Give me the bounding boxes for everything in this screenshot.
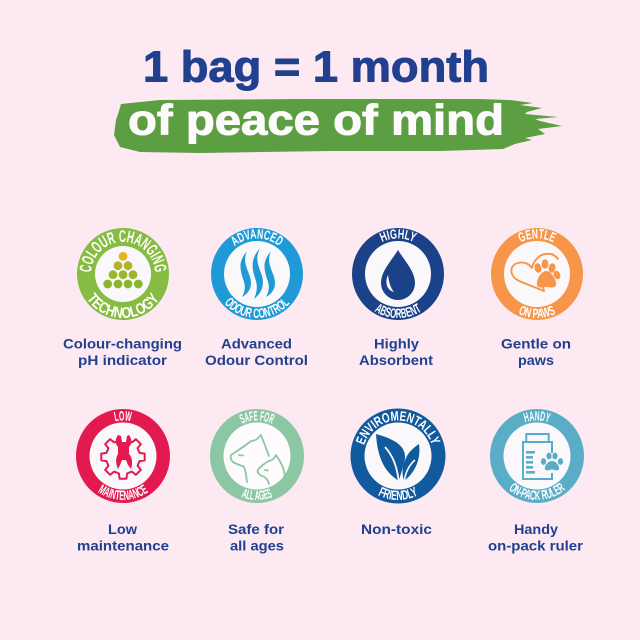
icon: heart with paw xyxy=(511,254,562,291)
label: gentle on paws: paws xyxy=(518,352,554,368)
label: low maintenance: maintenance xyxy=(77,538,169,554)
badge: low maintenance xyxy=(76,409,170,503)
badge: gentle on paws xyxy=(491,228,583,320)
label: highly absorbent: Highly xyxy=(374,336,419,352)
badge text: odour control: ODOUR CONTROL xyxy=(226,298,290,318)
badge text: gentle: GENTLE xyxy=(518,229,556,242)
badge text: friendly: FRIENDLY xyxy=(378,486,416,500)
label: highly absorbent: Absorbent xyxy=(359,352,433,368)
badge text: safe for: SAFE FOR xyxy=(239,411,275,424)
green brush banner with subtitle xyxy=(114,96,562,153)
label: advanced odour control: Advanced xyxy=(221,336,292,352)
icon: pyramid of dots xyxy=(103,252,143,288)
icon: two leaves xyxy=(376,434,419,483)
icon: gear and wrench xyxy=(101,433,145,479)
label: handy on-pack ruler xyxy=(488,521,584,554)
badge text: handy: HANDY xyxy=(523,411,552,422)
badge text: on paws: ON PAWS xyxy=(519,306,555,318)
label: gentle on paws xyxy=(501,336,571,368)
badge: colour changing technology xyxy=(77,228,169,320)
badge: advanced odour control xyxy=(211,228,303,320)
label: colour-changing pH indicator: Colour-changing xyxy=(63,336,182,352)
badge text: technology: TECHNOLOGY xyxy=(88,292,158,318)
badge: environmentally friendly xyxy=(350,408,446,504)
label: advanced odour control xyxy=(205,336,308,368)
icon: water drop xyxy=(381,250,415,300)
badge text: all ages: ALL AGES xyxy=(242,488,272,500)
badge text: advanced: ADVANCED xyxy=(231,229,283,246)
badge text: highly: HIGHLY xyxy=(379,229,418,242)
label: low maintenance xyxy=(77,521,169,554)
green brush banner with subtitle: of peace of mind xyxy=(128,96,504,144)
label: advanced odour control: Odour Control xyxy=(205,352,308,368)
badge text: absorbent: ABSORBENT xyxy=(374,303,420,318)
badge text: on-pack ruler: ON-PACK RULER xyxy=(510,483,566,500)
label: safe for all ages xyxy=(228,521,285,554)
icon: pack with ruler and paw xyxy=(523,434,564,479)
label: highly absorbent xyxy=(359,336,433,368)
label: colour-changing pH indicator xyxy=(63,336,182,368)
badge: highly absorbent xyxy=(352,228,444,320)
badge: handy on-pack ruler xyxy=(490,409,584,503)
icon: cat and kitten xyxy=(231,435,285,484)
badge text: colour changing: COLOUR CHANGING xyxy=(80,230,166,272)
icon: odour waves xyxy=(240,248,275,299)
label: safe for all ages: Safe for xyxy=(228,521,285,537)
badge text: environmentally: ENVIROMENTALLY xyxy=(356,411,440,445)
badge: safe for all ages xyxy=(210,409,304,503)
label: handy on-pack ruler: on-pack ruler xyxy=(488,538,584,554)
label: colour-changing pH indicator: pH indicator xyxy=(78,352,168,368)
title: 1 bag = 1 month: 1 bag = 1 month xyxy=(143,42,489,92)
badge text: low: LOW xyxy=(114,411,132,422)
label: gentle on paws: Gentle on xyxy=(501,336,571,352)
label: safe for all ages: all ages xyxy=(230,538,284,554)
badge text: maintenance: MAINTENANCE xyxy=(98,484,148,500)
label: handy on-pack ruler: Handy xyxy=(514,521,558,537)
label: non-toxic: Non-toxic xyxy=(361,521,432,537)
label: low maintenance: Low xyxy=(108,521,137,537)
